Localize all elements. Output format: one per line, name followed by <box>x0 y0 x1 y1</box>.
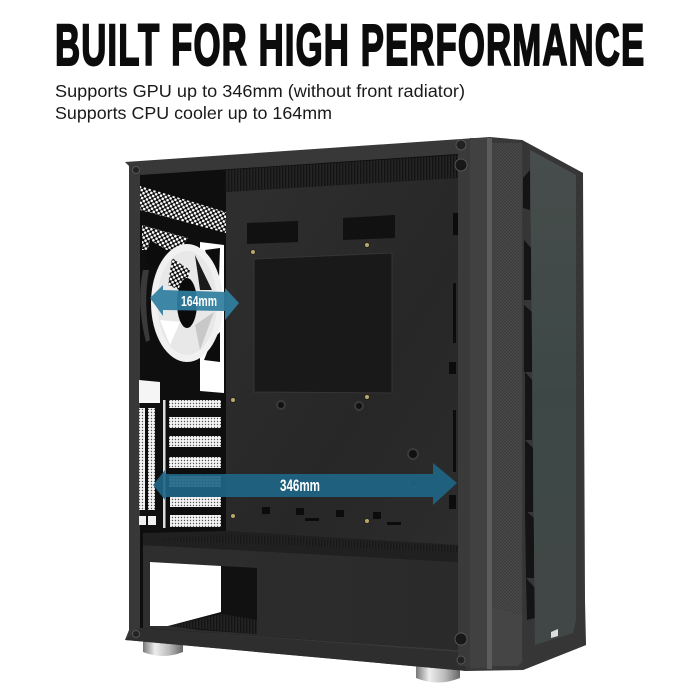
346mm arrow <box>153 463 457 505</box>
case body outline <box>125 137 586 671</box>
shroud top <box>143 531 458 562</box>
specification text <box>55 81 465 123</box>
cpu cutout <box>254 253 392 393</box>
icon: left foot <box>143 640 183 656</box>
title: BUILT FOR HIGH PERFORMANCE <box>55 14 644 78</box>
case bottom rail <box>125 628 467 671</box>
motherboard tray <box>226 178 458 546</box>
164mm label: 164mm <box>181 293 217 310</box>
top cable cutouts <box>247 221 298 244</box>
top mesh rail <box>225 155 458 192</box>
164mm arrow <box>150 285 239 320</box>
upper perforated vent <box>142 225 188 250</box>
pci slot strips <box>169 400 221 527</box>
346mm label: 346mm <box>280 476 320 495</box>
specification text: Supports CPU cooler up to 164mm <box>55 103 332 123</box>
front vent channel <box>522 140 586 670</box>
front panel logo <box>551 629 558 638</box>
white opening behind fan <box>200 242 224 393</box>
front mesh panel <box>492 143 522 666</box>
white psu opening <box>150 562 221 626</box>
psu cutout <box>150 562 257 634</box>
tray grommets <box>277 401 418 487</box>
standoffs <box>230 242 370 524</box>
icon: right foot <box>416 660 460 682</box>
rear fan with white ring <box>140 240 223 362</box>
front bezel <box>132 138 492 669</box>
top perforated vent <box>140 186 226 233</box>
specification text: Supports GPU up to 346mm (without front radiator) <box>55 81 465 101</box>
vertical perforated strips <box>139 400 166 528</box>
shroud front <box>143 545 458 650</box>
psu shroud <box>143 531 458 650</box>
pc case <box>125 137 586 671</box>
interior opening <box>140 154 458 650</box>
glass front panel <box>530 150 576 645</box>
cable slots <box>262 213 458 525</box>
rear fan bracket and openings <box>139 225 224 403</box>
white opening below fan <box>139 380 160 403</box>
